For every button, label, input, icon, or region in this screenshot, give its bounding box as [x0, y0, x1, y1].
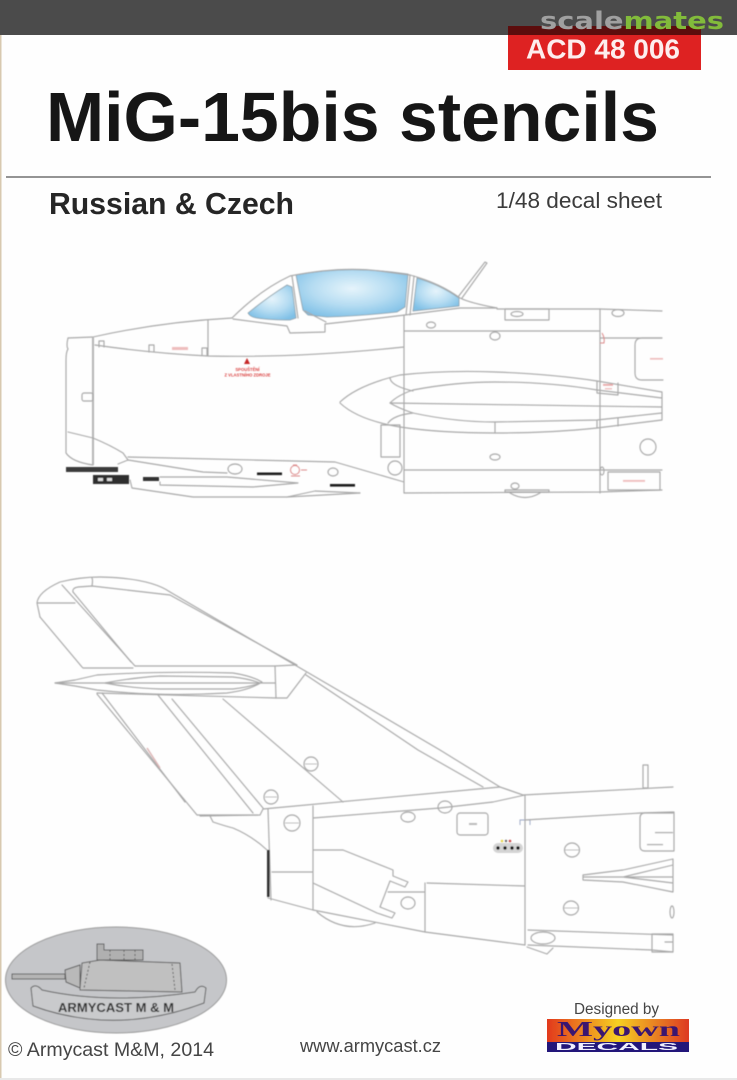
- red stencils forward: [172, 347, 307, 476]
- Armycast logo: [6, 927, 226, 1033]
- colour stencil dots: [493, 820, 530, 853]
- left edge stripe: [0, 35, 2, 1080]
- lower fin and rudder panels: [97, 693, 343, 831]
- black underside markings: [66, 467, 355, 487]
- fin and rudder: [37, 577, 523, 795]
- designed by label: Designed by: [574, 1001, 659, 1018]
- title: MiG-15bis stencils: [46, 78, 659, 156]
- rear fuselage panels: [381, 309, 663, 498]
- bottom edge strip: [0, 1078, 737, 1080]
- mid fuselage panels: [200, 787, 673, 945]
- scalemates watermark: scale mates: [540, 7, 724, 35]
- copyright: © Armycast M&M, 2014: [8, 1039, 214, 1061]
- intake fairing: [340, 371, 662, 433]
- tail section drawing: [37, 577, 674, 954]
- catalogue code badge: ACD 48 006: [526, 34, 680, 64]
- fin bullet fairing: [55, 672, 276, 698]
- catalogue code badge: [508, 26, 701, 70]
- scale note: 1/48 decal sheet: [496, 188, 663, 213]
- nose and forward fuselage lines: [66, 318, 404, 497]
- website: www.armycast.cz: [299, 1036, 441, 1056]
- Myown Decals logo: Myown: [557, 1017, 681, 1041]
- red stencils forward: Z VLASTNÍHO ZDROJE: [224, 372, 271, 378]
- Myown Decals logo: DECALS: [555, 1042, 679, 1053]
- red stencils forward: SPOUŠTĚNÍ: [235, 367, 260, 372]
- subtitle: Russian & Czech: [49, 187, 294, 221]
- icon: tank turret: [12, 944, 182, 992]
- top banner: [0, 0, 737, 70]
- logo ribbon: [31, 986, 206, 1020]
- logo text: ARMYCAST M & M: [58, 1000, 174, 1015]
- title rule: [6, 176, 711, 178]
- Myown Decals logo: [547, 1017, 689, 1053]
- canopy frame and antenna: [232, 262, 497, 333]
- rear fuselage right: [525, 765, 674, 954]
- canopy glass: [248, 270, 459, 320]
- fuselage side view drawing: [66, 262, 663, 498]
